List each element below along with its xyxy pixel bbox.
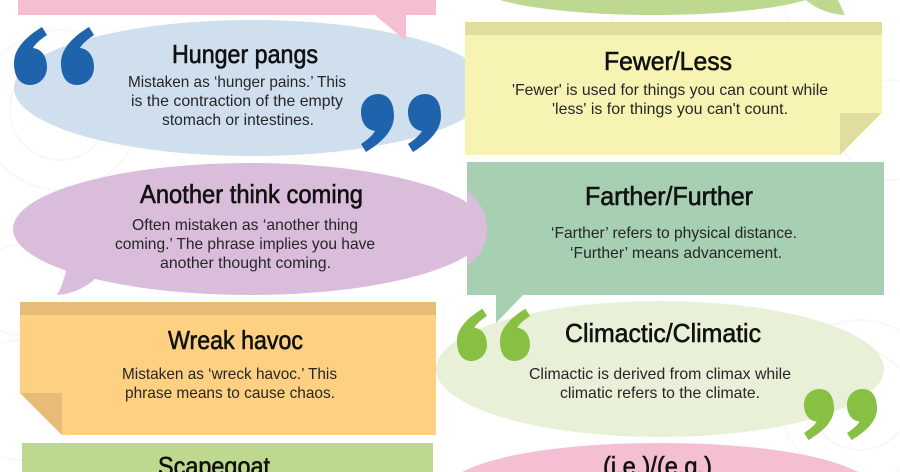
- text: Hunger pangs description: Mistaken as ‘hunger pains.’ This: [128, 74, 346, 91]
- heading: Farther/Further: Farther/Further: [585, 181, 753, 211]
- text: Another think coming description: coming.’ The phrase implies you have: [115, 236, 375, 253]
- panel: top green speech bubble: [500, 0, 845, 15]
- heading: Climactic/Climatic: Climactic/Climatic: [565, 318, 761, 348]
- heading: Hunger pangs: Hunger pangs: [172, 39, 318, 69]
- panel: Another think coming: [13, 163, 487, 295]
- heading: Fewer/Less: Fewer/Less: [604, 46, 732, 76]
- heading: Another think coming: Another think coming: [140, 179, 363, 209]
- icon: closing quote green: [804, 389, 877, 440]
- panel: Climactic/Climatic: [436, 162, 884, 440]
- panel: Scapegoat: [22, 443, 433, 472]
- text: Hunger pangs description: [128, 74, 346, 129]
- icon: opening quote green: [457, 309, 530, 361]
- text: Fewer/Less description: 'Fewer' is used for things you can count while: [512, 82, 828, 99]
- text: Another think coming description: [115, 217, 375, 272]
- text: Climactic/Climatic description: climatic refers to the climate.: [560, 385, 760, 402]
- icon: opening quote blue: [14, 27, 94, 85]
- panel: Fewer/Less note: [465, 22, 882, 155]
- panel: Hunger pangs: [14, 15, 490, 156]
- text: Farther/Further description: ‘Further’ means advancement.: [570, 245, 782, 262]
- text: Hunger pangs description: is the contraction of the empty: [131, 93, 343, 110]
- text: Hunger pangs description: stomach or intestines.: [162, 112, 314, 129]
- text: Farther/Further description: [551, 225, 797, 262]
- heading: Wreak havoc: Wreak havoc: [168, 325, 303, 355]
- text: Another think coming description: another thought coming.: [160, 255, 331, 272]
- icon: closing quote blue: [361, 94, 441, 152]
- panel: Wreak havoc note: [20, 302, 436, 435]
- text: Farther/Further description: ‘Farther’ refers to physical distance.: [551, 225, 797, 242]
- text: Climactic/Climatic description: [529, 366, 791, 402]
- text: Fewer/Less description: 'less' is for things you can't count.: [552, 101, 788, 118]
- text: Another think coming description: Often mistaken as ‘another thing: [132, 217, 358, 234]
- text: Fewer/Less description: [512, 82, 828, 118]
- text: Wreak havoc description: [122, 366, 337, 402]
- text: Wreak havoc description: Mistaken as ‘wreck havoc.’ This: [122, 366, 337, 383]
- panel: Farther/Further: [467, 162, 884, 323]
- panel: (i.e.)/(e.g.): [462, 443, 858, 472]
- panel: top pink note: [18, 0, 436, 41]
- text: Climactic/Climatic description: Climactic is derived from climax while: [529, 366, 791, 383]
- text: Wreak havoc description: phrase means to cause chaos.: [125, 385, 335, 402]
